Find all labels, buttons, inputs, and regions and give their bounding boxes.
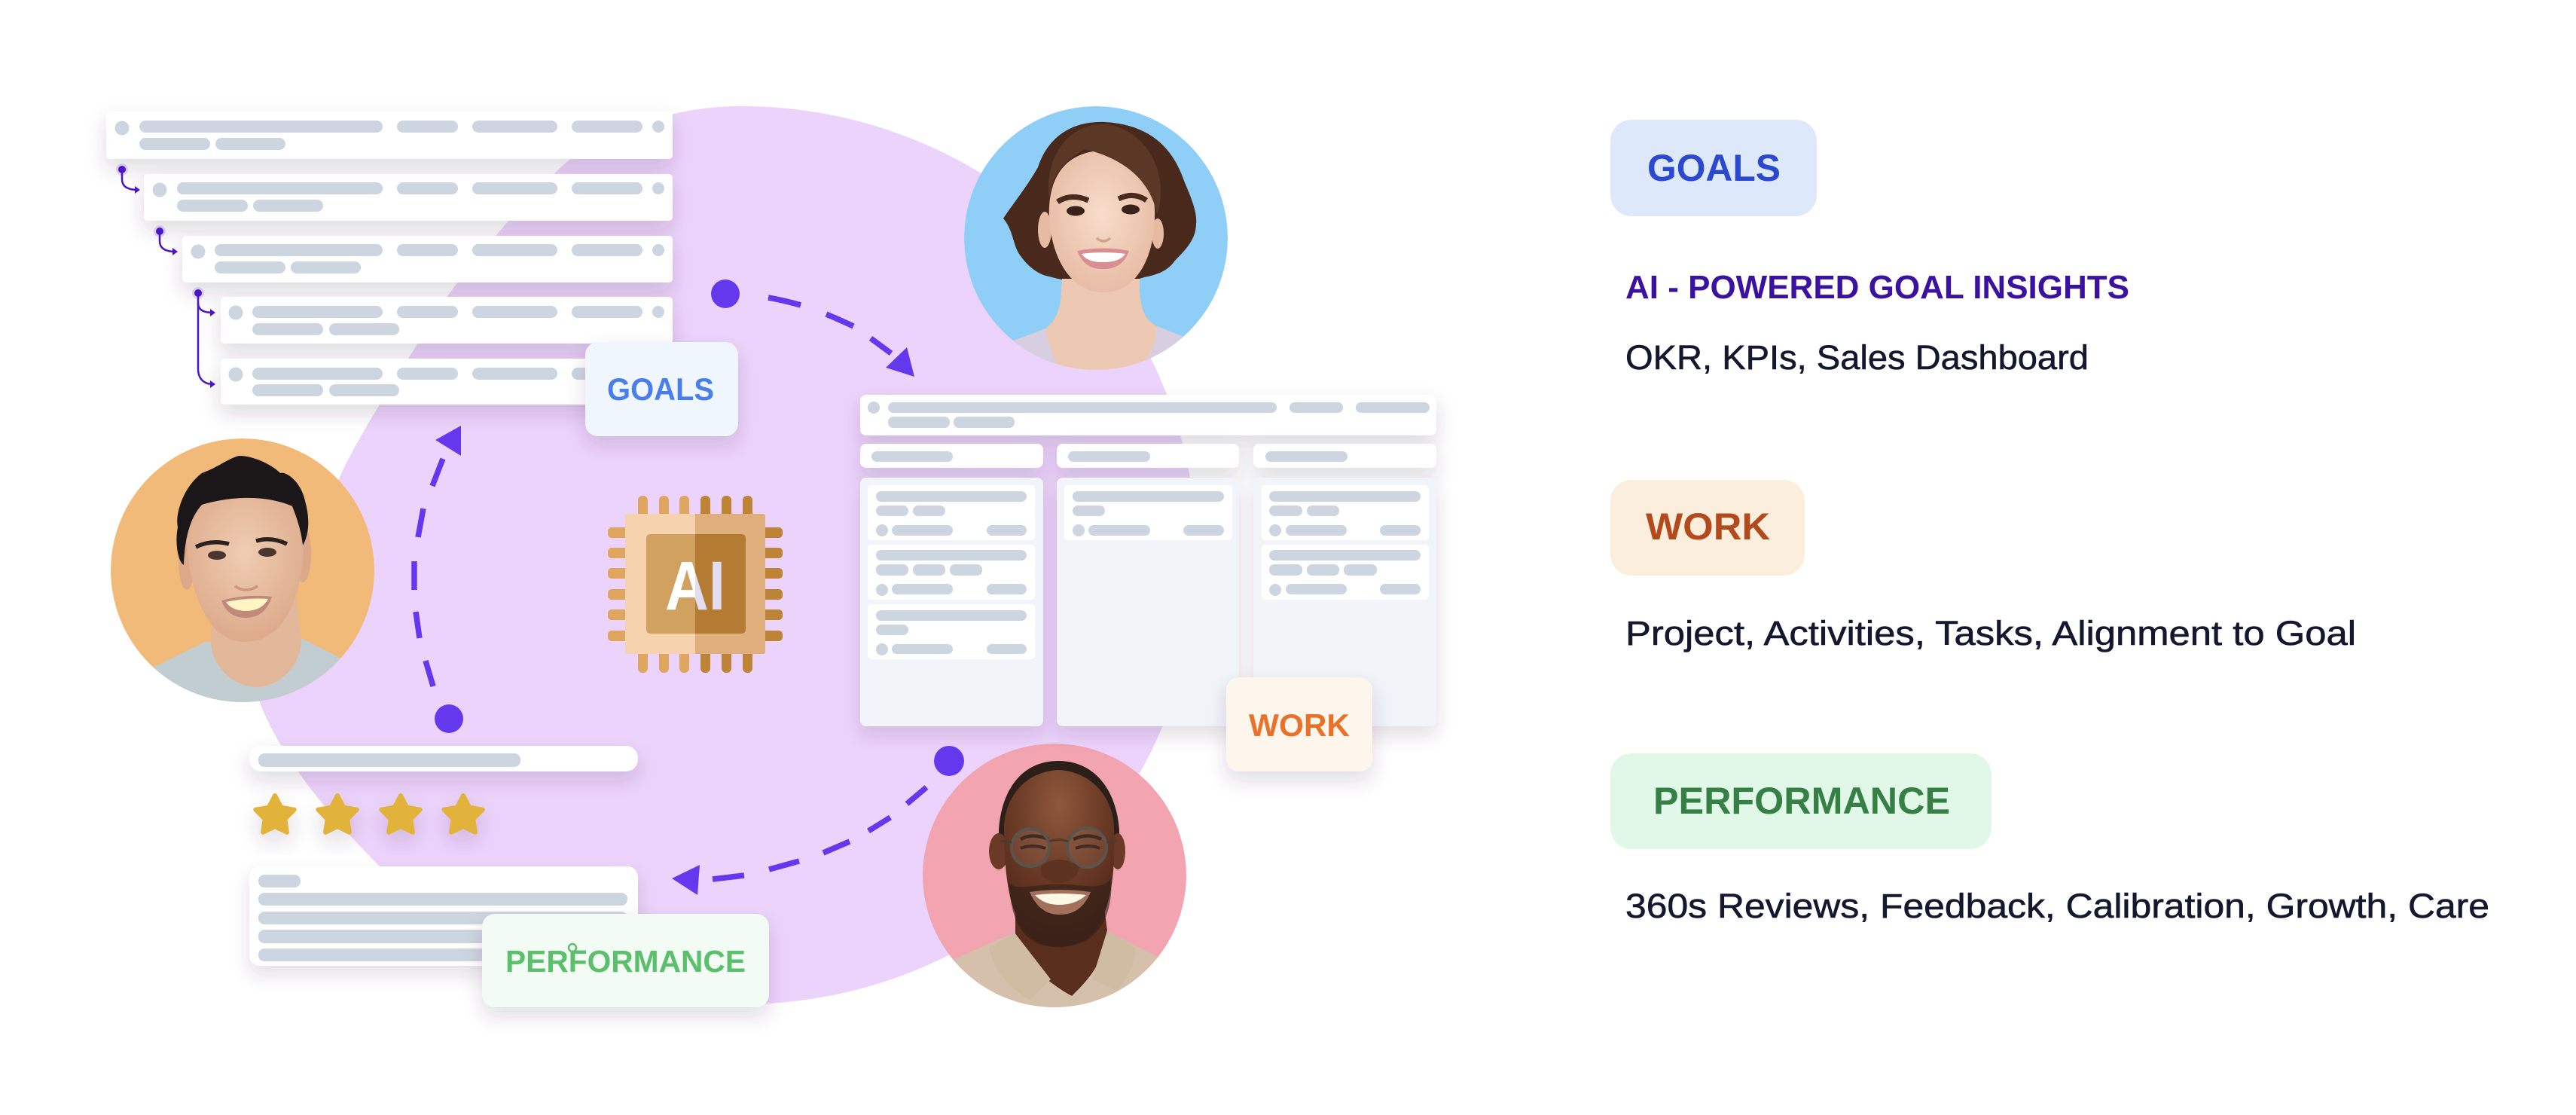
goals badge: GOALS	[1647, 147, 1781, 189]
goals description: OKR, KPIs, Sales Dashboard	[1625, 338, 2089, 377]
icon: AI chip	[608, 496, 783, 673]
goal row 4	[221, 297, 673, 344]
board header	[860, 395, 1436, 435]
goal row 5	[221, 359, 673, 405]
work tag	[1226, 677, 1372, 771]
kanban column 2	[1057, 478, 1239, 726]
goals badge	[1610, 120, 1817, 216]
performance tag: PERFORMANCE	[505, 944, 746, 979]
performance badge: PERFORMANCE	[1653, 780, 1950, 822]
goals tag	[585, 342, 738, 436]
panel: legend	[1610, 120, 2489, 925]
icon: AI chip: AI	[665, 548, 725, 625]
panel: goal hierarchy list	[106, 112, 673, 405]
work description: Project, Activities, Tasks, Alignment to Goal	[1625, 614, 2356, 652]
column headers	[860, 444, 1436, 468]
review comment card	[249, 866, 638, 966]
work tag: WORK	[1249, 707, 1350, 743]
avatar: man with glasses	[919, 744, 1190, 1010]
goal row 2	[144, 174, 673, 221]
AI insights heading: AI - POWERED GOAL INSIGHTS	[1625, 269, 2129, 306]
goal row 1	[106, 112, 673, 159]
goal row 3	[182, 236, 673, 283]
performance description: 360s Reviews, Feedback, Calibration, Growth, Care	[1625, 887, 2489, 925]
work badge: WORK	[1646, 506, 1770, 548]
star rating	[255, 796, 483, 832]
kanban column 3	[1253, 478, 1436, 726]
work badge	[1610, 480, 1805, 576]
avatar: man with grey shirt	[111, 438, 374, 708]
review title card	[249, 746, 638, 771]
purple background blob	[259, 106, 1197, 1004]
hierarchy connectors	[116, 163, 215, 388]
performance badge	[1610, 753, 1992, 849]
kanban column 1	[860, 478, 1043, 726]
dashed arrow: performance to goals	[414, 426, 463, 733]
dashed arrow: goals to work	[711, 280, 914, 377]
panel: performance reviews	[249, 746, 638, 966]
performance tag	[482, 914, 769, 1007]
dashed arrow: work to performance	[672, 746, 964, 895]
panel: kanban board	[860, 395, 1436, 726]
avatar: woman	[964, 106, 1228, 377]
goals tag: GOALS	[607, 371, 714, 407]
